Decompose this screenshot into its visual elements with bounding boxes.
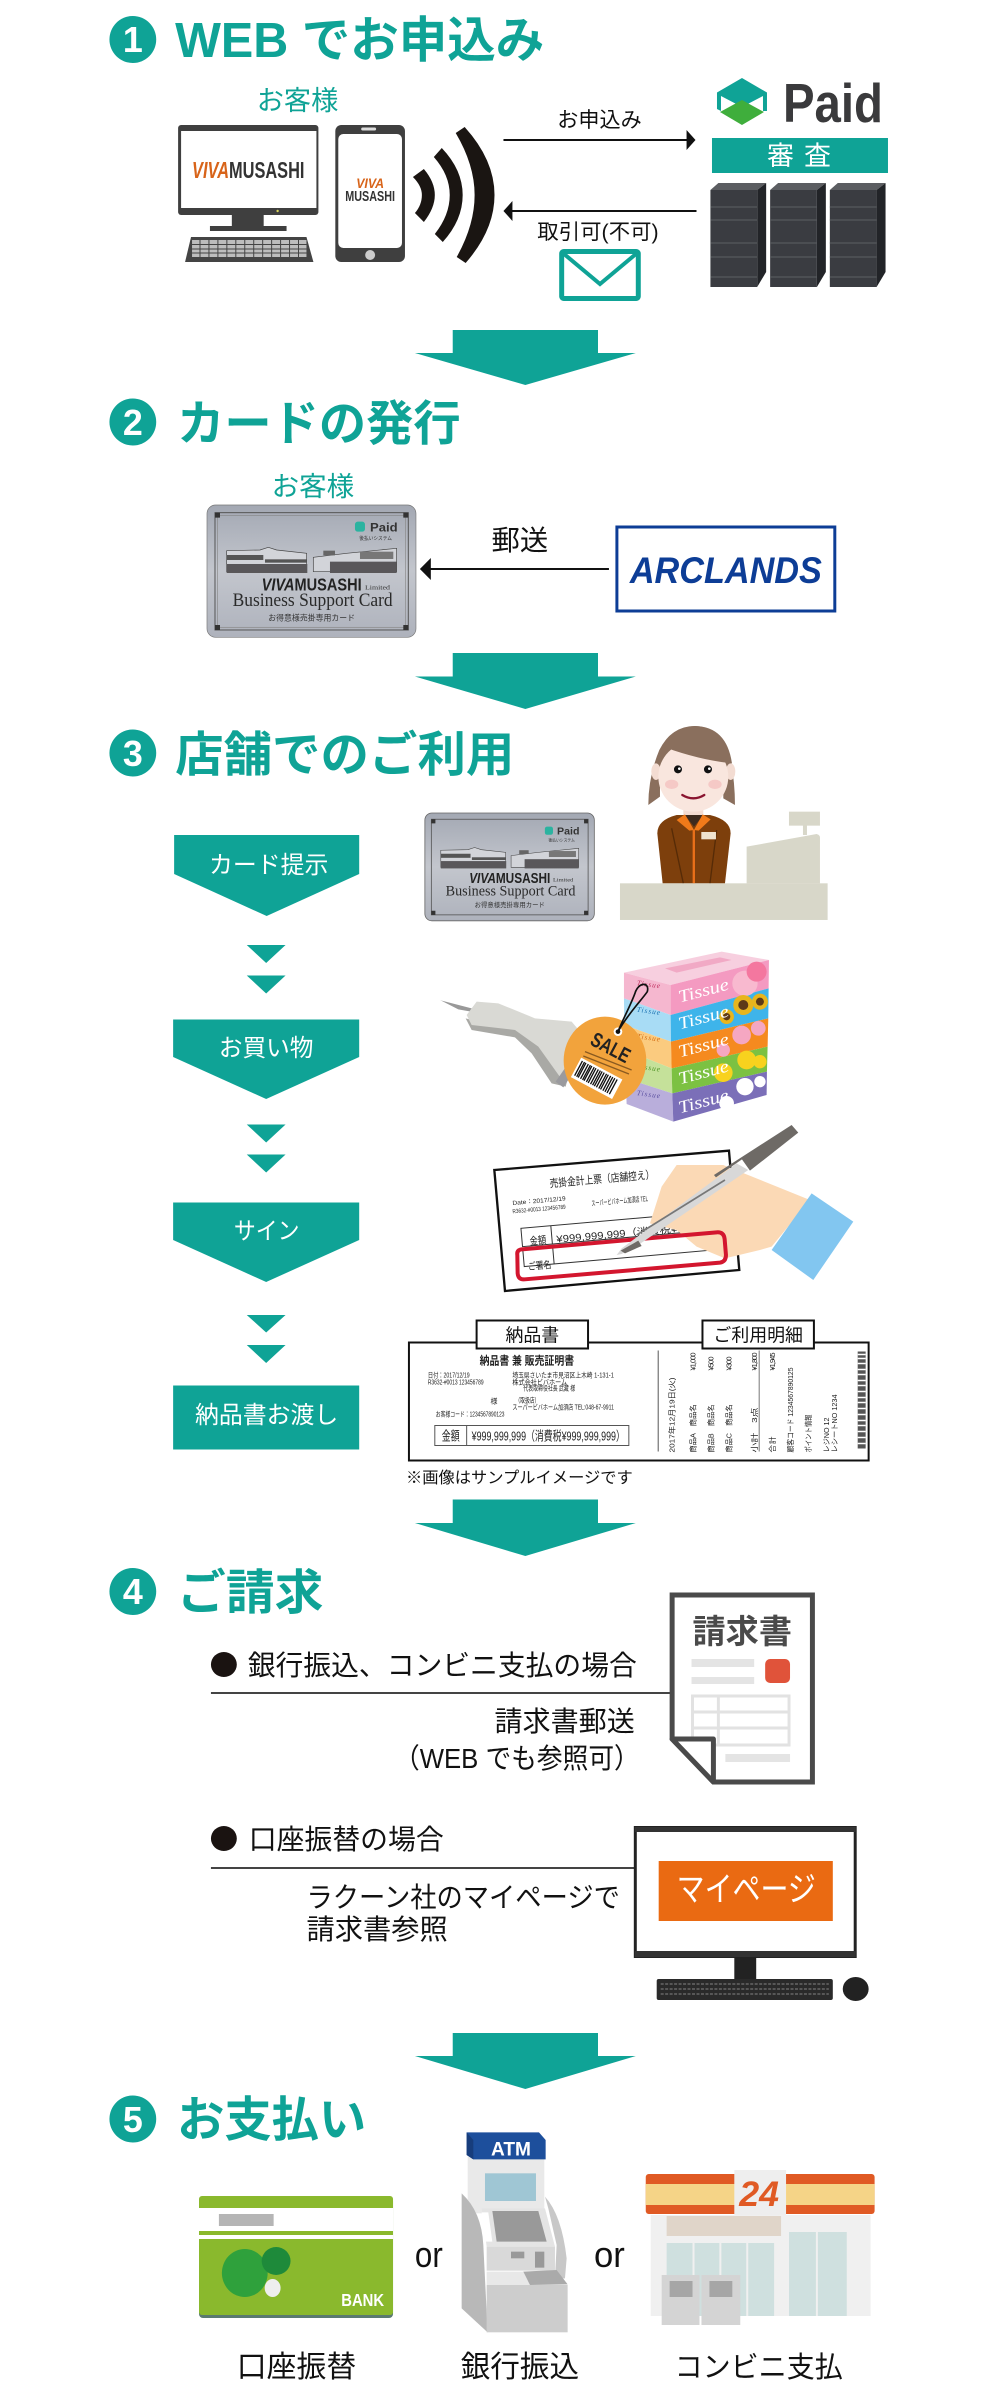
delivery slip text: 株式会社ビバホーム	[512, 1377, 567, 1387]
arrow: step 2 to step 3	[415, 653, 636, 709]
flow step: shopping: お買い物	[219, 1035, 313, 1062]
billing case 1 web note: （WEB でも参照可）	[394, 1743, 640, 1774]
step 1 number badge: 1	[123, 19, 143, 60]
illustration: signing the slip: R3632-#0013 123456789	[512, 1205, 566, 1215]
billing case 2 text	[306, 1882, 620, 1945]
icon: invoice document	[672, 1595, 812, 1782]
divider: bank transfer and convenience store	[211, 1692, 673, 1694]
tissue box brand text: Tissue	[676, 1001, 731, 1033]
illustration: signing the slip: ¥999,999,999（消費税¥999,	[555, 1220, 700, 1246]
icon: wireless signal	[413, 127, 495, 263]
business support card: Business Support Card	[233, 590, 393, 611]
flow step: present card	[174, 835, 359, 916]
step 5 heading: お支払い	[177, 2094, 366, 2147]
tissue box side text	[636, 978, 661, 1100]
step 4 heading: ご請求	[177, 1567, 323, 1620]
business support card: お得意様売掛専用カード	[268, 613, 355, 623]
panel: step 3 in-store use	[109, 726, 869, 1487]
ARCLANDS logo	[617, 527, 835, 611]
sleeve cuff	[772, 1193, 853, 1280]
Paid logo	[717, 72, 883, 134]
statement text: 商品A 商品名	[688, 1405, 697, 1452]
card presented: Limited	[553, 878, 574, 884]
label: application: お申込み	[557, 109, 642, 132]
delivery slip text: ¥999,999,999（消費税¥999,999,999）	[471, 1428, 625, 1444]
delivery slip text	[428, 1353, 629, 1446]
step 2 heading: カードの発行	[177, 398, 461, 451]
step 2 number badge: 2	[123, 402, 143, 443]
panel: step 2 card issuing	[109, 398, 835, 637]
flow step: signature: サイン	[234, 1218, 299, 1245]
icon: ATM: ATM	[491, 2140, 531, 2161]
hand	[650, 1165, 810, 1258]
icon: bank card	[199, 2196, 393, 2318]
card presented: Business Support Card	[446, 882, 576, 899]
flow step: hand over delivery slip	[173, 1386, 359, 1450]
illustration: signing the slip: Date：2017/12/19	[512, 1196, 567, 1207]
illustration: signing the slip	[494, 1125, 853, 1291]
statement text: ¥500	[706, 1357, 715, 1370]
tissue box brand text: Tissue	[676, 975, 731, 1007]
panel: step 5 payment	[109, 2094, 875, 2384]
tissue box flowers	[714, 962, 768, 1111]
illustration: signing the slip: 売掛金計上票（店舗控え）	[549, 1167, 655, 1190]
billing case 2 heading: 口座振替の場合	[249, 1824, 444, 1855]
tissue box side text: Tissue	[636, 978, 661, 990]
icon: monitor with my page	[635, 1827, 869, 2001]
flow step: hand over delivery slip: 納品書お渡し	[195, 1402, 338, 1429]
tissue box brand text	[676, 975, 731, 1117]
step 4 number badge: 4	[123, 1571, 143, 1612]
phone screen logo	[345, 175, 395, 205]
card presented: お得意様売掛専用カード	[475, 900, 545, 909]
label: bank transfer: 銀行振込	[461, 2351, 579, 2384]
statement text	[658, 1350, 866, 1452]
icon: ATM	[462, 2132, 568, 2332]
billing case 2 text: ラクーン社のマイページで	[306, 1882, 620, 1913]
arrow: result to customer	[503, 201, 696, 221]
statement text: 合計	[767, 1436, 777, 1452]
step 3 number badge: 3	[123, 733, 143, 774]
my page button	[659, 1861, 833, 1921]
tissue box brand text: Tissue	[676, 1085, 731, 1117]
step 3 heading: 店舗でのご利用	[175, 729, 514, 782]
icon: mail	[562, 252, 638, 298]
illustration: signing the slip: スーパービバホーム加須店 TEL	[591, 1194, 648, 1208]
statement text: ¥1,000	[689, 1352, 697, 1370]
icon: bank card: BANK	[341, 2290, 384, 2310]
icon: convenience store	[646, 2170, 875, 2325]
small arrows	[247, 1124, 286, 1172]
tab: usage statement: ご利用明細	[713, 1325, 803, 1346]
label: mailing: 郵送	[492, 525, 548, 556]
pen	[617, 1125, 798, 1255]
bullet	[211, 1652, 237, 1677]
card presented: 後払いシステム	[548, 837, 575, 843]
step 1 heading: WEB でお申込み	[175, 14, 544, 68]
statement text: レシートNO 1234	[830, 1395, 839, 1452]
statement text: ポイント情報	[803, 1414, 813, 1452]
phone screen logo: MUSASHI	[345, 188, 395, 205]
step 5 number badge	[109, 2096, 156, 2142]
small arrows	[247, 945, 286, 994]
tissue box brand text: Tissue	[676, 1056, 731, 1088]
step 2 number badge	[109, 398, 156, 446]
step 3 number badge	[109, 730, 156, 776]
business support card	[207, 505, 416, 637]
flow step: present card: カード提示	[209, 852, 328, 879]
arrow: application to Paid	[503, 130, 696, 150]
panel: step 4 billing	[109, 1567, 869, 2001]
delivery slip text: お客様コード：1234567890123	[436, 1409, 505, 1419]
illustration: signing the slip: 金額	[529, 1234, 547, 1248]
card presented	[425, 813, 594, 921]
icon: servers	[710, 183, 886, 287]
divider: account transfer	[211, 1867, 635, 1869]
computer screen logo: VIVAMUSASHI	[192, 157, 304, 183]
tab: delivery slip: 納品書	[505, 1325, 559, 1346]
customer label: お客様	[272, 472, 354, 502]
red signature highlight	[517, 1232, 726, 1279]
ARCLANDS logo: ARCLANDS	[629, 550, 822, 591]
tissue box side text: Tissue	[636, 1005, 661, 1017]
arrow: step 4 to step 5	[415, 2033, 636, 2089]
business support card: Limited	[365, 584, 391, 591]
delivery slip text: スーパービバホーム加須店 TEL:048-67-9911	[512, 1402, 614, 1412]
statement text: 2017年12月19日(火)	[667, 1377, 677, 1452]
or: or	[415, 2234, 443, 2275]
icon: invoice document: 請求書	[693, 1613, 792, 1650]
arrow: mailing to customer	[420, 558, 609, 580]
label: convenience store payment: コンビニ支払	[675, 2352, 843, 2384]
label: account transfer: 口座振替	[237, 2351, 356, 2384]
sale tag	[564, 984, 648, 1105]
label: approval result: 取引可(不可)	[537, 221, 659, 244]
panel: step 1 web application	[109, 14, 888, 299]
delivery slip text: 金額	[442, 1428, 460, 1444]
delivery slip text: 納品書 兼 販売証明書	[480, 1353, 574, 1368]
sample image note: ※画像はサンプルイメージです	[406, 1469, 633, 1487]
step 4 number badge	[109, 1568, 156, 1615]
tab: delivery slip	[477, 1320, 588, 1348]
customer label: お客様	[257, 86, 338, 116]
illustration: barcode scanner, sale tag and tissue boxes	[440, 952, 769, 1122]
delivery slip text: （取扱店）	[515, 1395, 539, 1405]
card presented: VIVAMUSASHI	[469, 871, 550, 887]
flow step: signature	[173, 1202, 359, 1282]
tissue box side text: Tissue	[636, 1061, 661, 1074]
screening banner: 審査	[767, 141, 831, 171]
tissue box brand text: Tissue	[676, 1029, 731, 1061]
small arrows	[247, 1315, 286, 1363]
phone screen logo: VIVA	[356, 175, 384, 191]
billing case 2 text: 請求書参照	[306, 1914, 448, 1945]
step 5 number badge: 5	[123, 2099, 143, 2140]
billing case 1 text: 請求書郵送	[495, 1706, 635, 1737]
delivery slip text: 代表取締役社長 武藏 様	[523, 1383, 575, 1393]
statement text: レジNO 12	[822, 1418, 831, 1452]
mouse	[843, 1977, 869, 2001]
business support card: Paid	[370, 521, 398, 535]
card presented: Paid	[557, 827, 580, 838]
keyboard	[657, 1979, 833, 2000]
illustration: signing the slip: ご署名	[527, 1258, 552, 1273]
statement text: ¥1,800	[750, 1352, 759, 1370]
scanner	[440, 1000, 590, 1087]
business support card: VIVAMUSASHI	[262, 575, 362, 595]
screening banner	[712, 138, 888, 173]
Paid logo: Paid	[783, 72, 883, 134]
statement text: ¥300	[724, 1357, 733, 1370]
statement text: 顧客コード 1234567890125	[785, 1368, 795, 1452]
arrow: step 1 to step 2	[415, 330, 636, 385]
tab: usage statement	[702, 1320, 814, 1348]
billing case 1 heading: 銀行振込、コンビニ支払の場合	[248, 1650, 637, 1681]
tissue box side text: Tissue	[636, 1088, 661, 1100]
icon: smartphone	[335, 125, 405, 262]
my page button: マイページ	[677, 1871, 816, 1909]
business support card: 後払いシステム	[359, 535, 392, 542]
delivery slip text: 埼玉県さいたま市見沼区上木崎 1-131-1	[512, 1370, 614, 1380]
or: or	[594, 2234, 625, 2275]
step 1 number badge	[109, 16, 156, 63]
delivery slip text: R3632-#0013 123456789	[428, 1379, 484, 1387]
delivery slip text: 様	[491, 1396, 498, 1406]
illustration: cashier at counter	[620, 726, 828, 920]
tissue box side text: Tissue	[636, 1031, 661, 1044]
icon: convenience store: 24	[738, 2175, 779, 2214]
icon: desktop computer	[178, 125, 318, 262]
statement text: 商品C 商品名	[723, 1405, 733, 1452]
delivery slip and statement sample	[409, 1320, 869, 1460]
statement text: 商品B 商品名	[705, 1405, 715, 1452]
statement text: 小計 3点	[749, 1407, 759, 1452]
statement text: ¥1,945	[768, 1352, 777, 1370]
delivery slip text: 日付：2017/12/19	[428, 1370, 470, 1380]
arrow: step 3 to step 4	[415, 1500, 636, 1556]
page content	[109, 14, 888, 2384]
flow step: shopping	[173, 1020, 359, 1099]
sale tag: SALE	[587, 1028, 634, 1068]
bullet	[211, 1826, 237, 1851]
